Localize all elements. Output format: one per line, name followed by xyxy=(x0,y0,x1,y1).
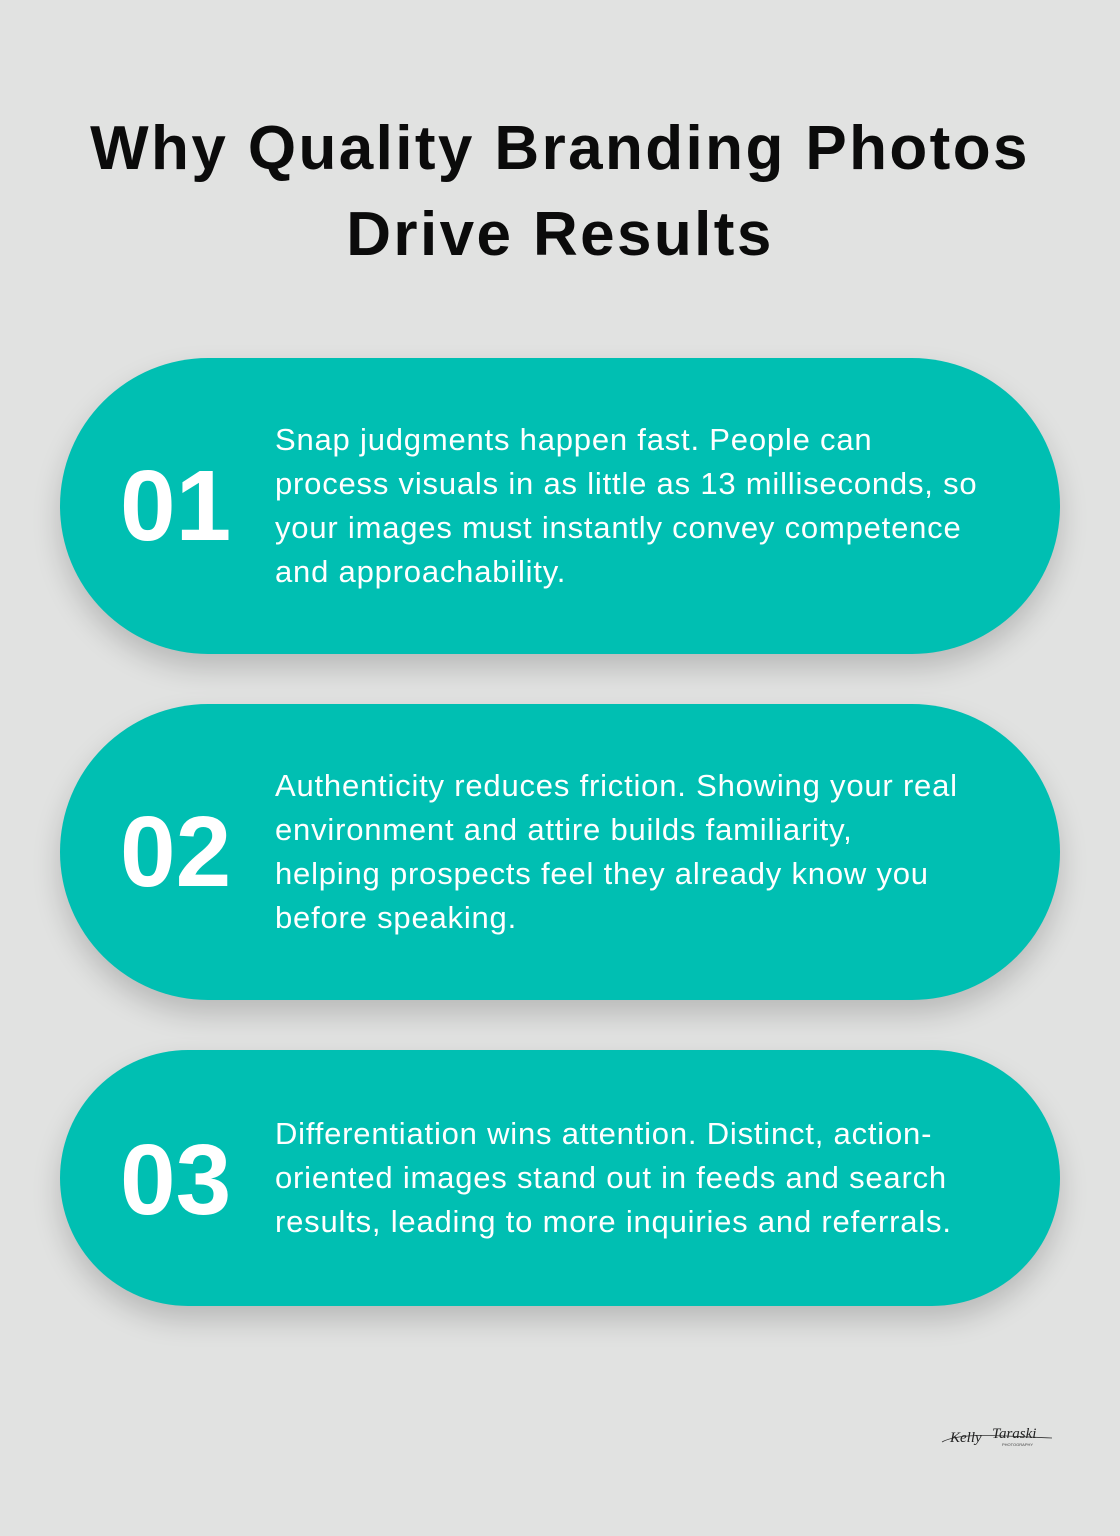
text 02 xyxy=(275,768,958,935)
text 01: your images must instantly convey competence xyxy=(275,510,962,545)
text 01 xyxy=(275,422,977,589)
panel: 02 xyxy=(60,704,1060,1000)
title xyxy=(90,114,1030,269)
logo signature: PHOTOGRAPHY xyxy=(1002,1442,1033,1447)
text 02: environment and attire builds familiarity, xyxy=(275,812,852,847)
text 02: helping prospects feel they already know you xyxy=(275,856,929,891)
text 03: results, leading to more inquiries and referrals. xyxy=(275,1204,952,1239)
logo signature xyxy=(942,1426,1052,1447)
title: Drive Results xyxy=(346,200,774,269)
text 03: oriented images stand out in feeds and search xyxy=(275,1160,947,1195)
text 01: Snap judgments happen fast. People can xyxy=(275,422,872,457)
text 03: Differentiation wins attention. Distinct, action- xyxy=(275,1116,932,1151)
text 02: before speaking. xyxy=(275,900,517,935)
text 01: process visuals in as little as 13 milliseconds, so xyxy=(275,466,977,501)
number 01: 01 xyxy=(120,450,231,562)
logo signature: Kelly xyxy=(949,1430,982,1446)
panel: 01 xyxy=(60,358,1060,654)
number 02: 02 xyxy=(120,796,231,908)
text 03 xyxy=(275,1116,952,1239)
title: Why Quality Branding Photos xyxy=(90,114,1030,183)
text 02: Authenticity reduces friction. Showing your real xyxy=(275,768,958,803)
panel: 03 xyxy=(60,1050,1060,1306)
logo signature: Taraski xyxy=(992,1426,1036,1442)
text 01: and approachability. xyxy=(275,554,566,589)
number 03: 03 xyxy=(120,1124,231,1236)
